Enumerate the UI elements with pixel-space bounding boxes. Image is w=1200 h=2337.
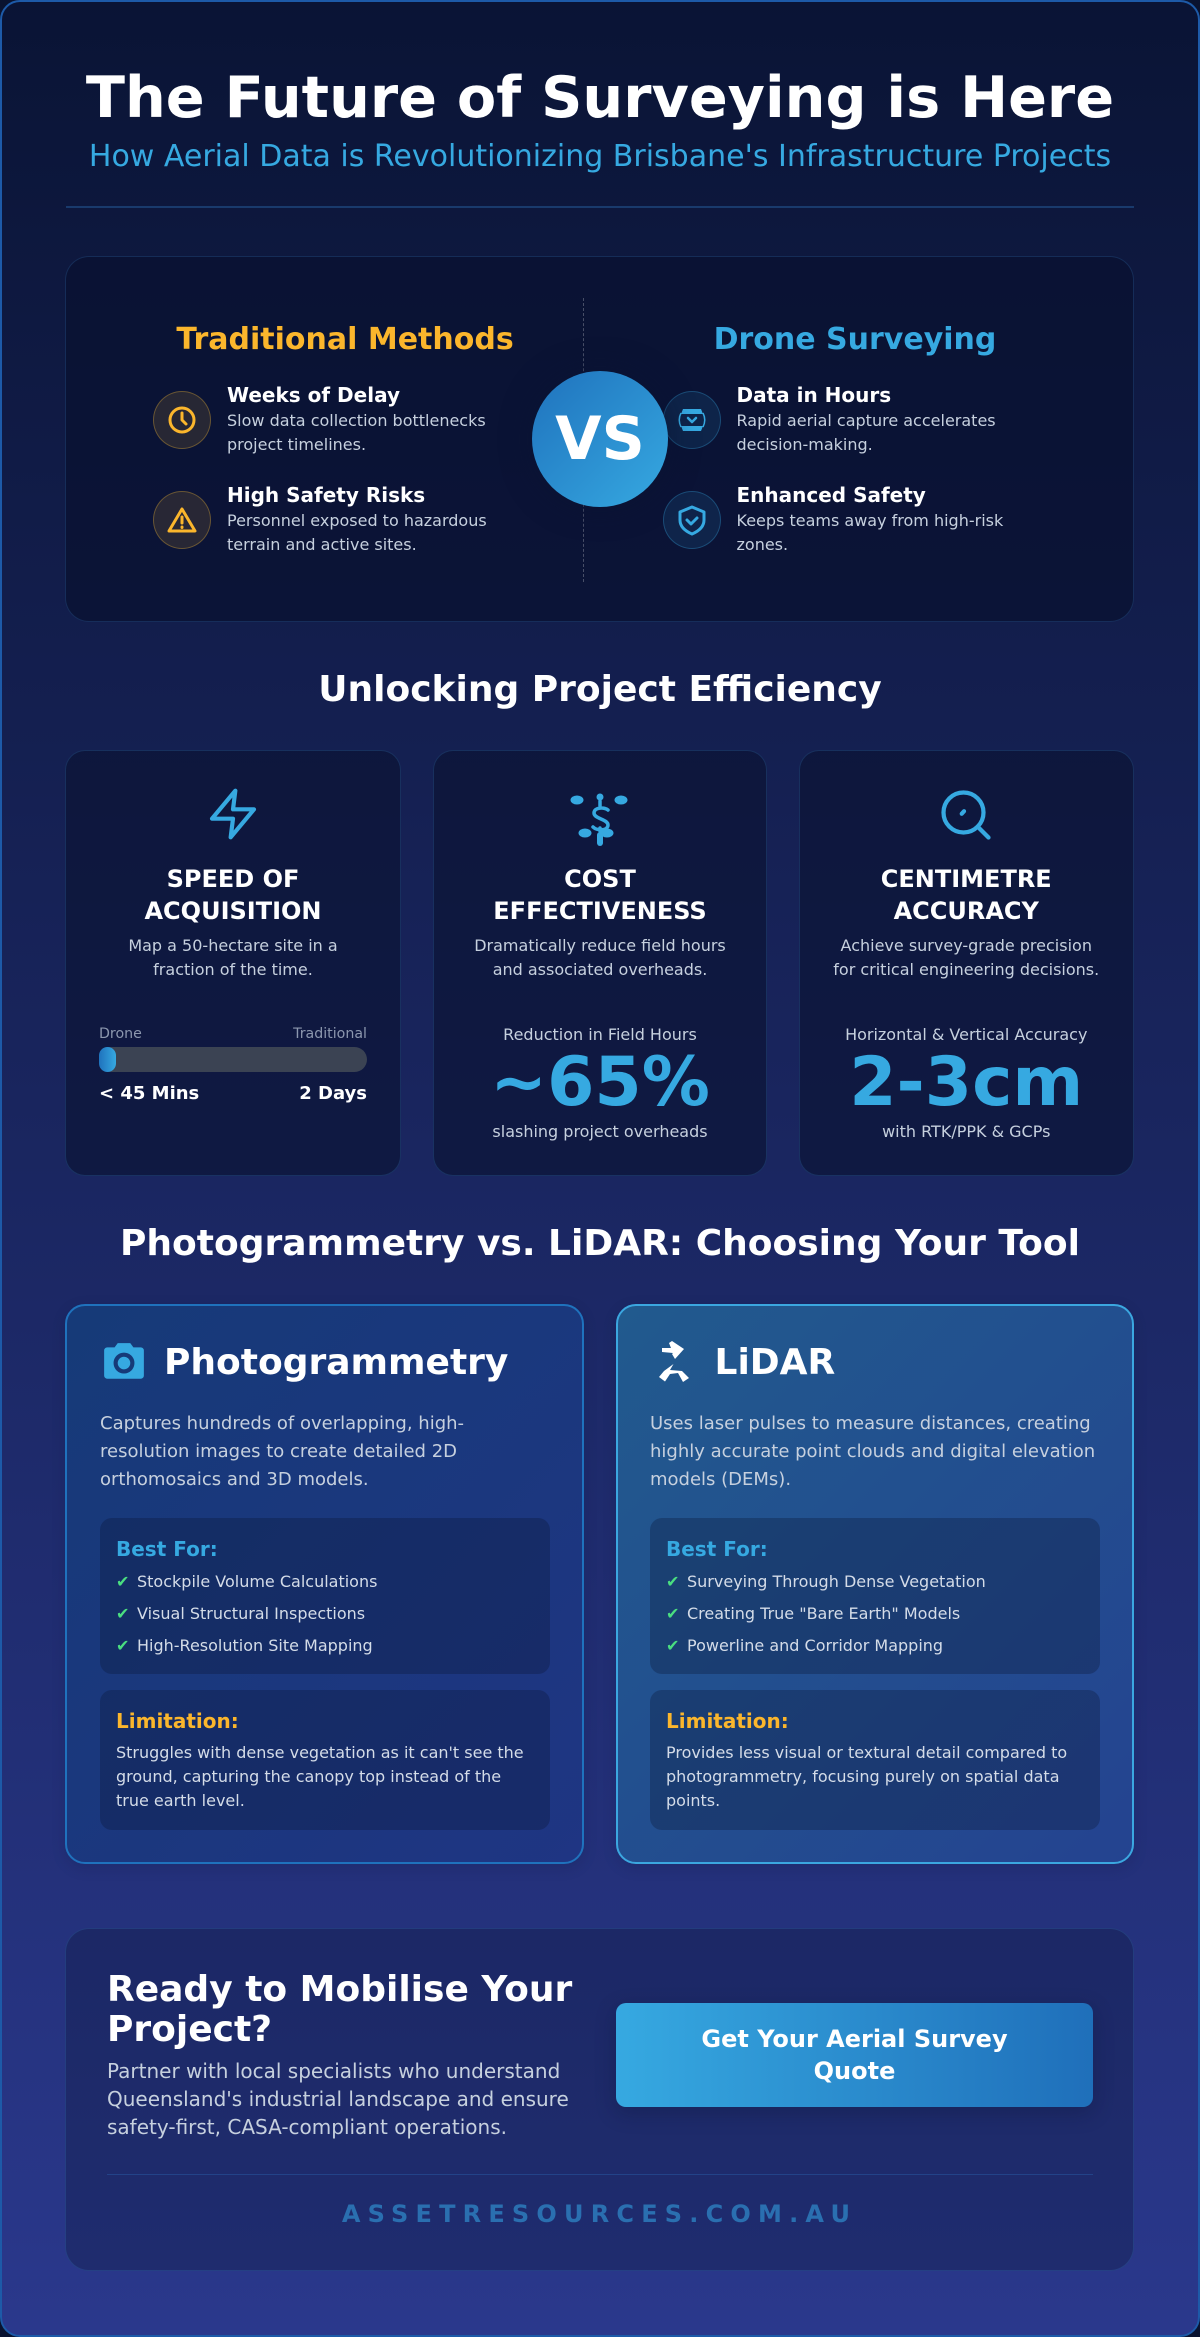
cta heading: Project? [107, 2009, 272, 2050]
panel: speed of acquisition [65, 750, 401, 1176]
icon: shield [662, 490, 720, 548]
text: weeks of delay: project timelines. [227, 435, 366, 454]
limitation box: ground, capturing the canopy top instead of the [116, 1767, 501, 1786]
text: weeks of delay: Slow data collection bottlenecks [227, 411, 486, 430]
subtitle: How Aerial Data is Revolutionizing Brisbane's Infrastructure Projects [89, 138, 1111, 174]
cta button: Get Your Aerial Survey [701, 2024, 1008, 2052]
best-for box: Powerline and Corridor Mapping [687, 1636, 943, 1655]
text: enhanced safety: Keeps teams away from high-risk [736, 511, 1003, 530]
limitation box: Limitation: [116, 1709, 239, 1733]
heading: drone surveying: Drone Surveying [714, 322, 996, 357]
cta button [616, 2002, 1093, 2106]
panel: traditional vs drone comparison [65, 256, 1134, 622]
description: for critical engineering decisions. [833, 960, 1099, 979]
description: resolution images to create detailed 2D [100, 1441, 457, 1462]
limitation box: photogrammetry, focusing purely on spatial data [666, 1767, 1060, 1786]
bar comparison: < 45 Mins [99, 1083, 199, 1104]
panel: photogrammetry [65, 1304, 584, 1864]
limitation box: Provides less visual or textural detail compared to [666, 1743, 1067, 1762]
best-for box: ✔ [666, 1636, 679, 1655]
text: high safety risks: High Safety Risks [227, 483, 425, 507]
heading: LiDAR [714, 1342, 835, 1382]
text: weeks of delay: Weeks of Delay [227, 383, 400, 407]
heading: EFFECTIVENESS [493, 897, 707, 925]
icon: clock [152, 390, 210, 448]
cta description: Queensland's industrial landscape and ensure [107, 2087, 569, 2111]
heading: traditional methods: Traditional Methods [176, 322, 514, 357]
description: models (DEMs). [650, 1469, 791, 1490]
stat: accuracy: with RTK/PPK & GCPs [882, 1122, 1050, 1141]
best-for box: High-Resolution Site Mapping [137, 1636, 373, 1655]
description: highly accurate point clouds and digital elevation [650, 1441, 1095, 1462]
stat: accuracy [845, 1025, 1087, 1141]
heading: CENTIMETRE [881, 865, 1052, 893]
heading: SPEED OF [167, 865, 299, 893]
title: The Future of Surveying is Here [86, 64, 1114, 130]
description: Dramatically reduce field hours [474, 936, 726, 955]
best-for box: ✔ [116, 1572, 129, 1591]
icon: data capture [662, 390, 720, 448]
heading: ACCURACY [894, 897, 1039, 925]
limitation box [650, 1690, 1100, 1830]
description [100, 1413, 464, 1490]
best-for box: Best For: [116, 1537, 218, 1561]
best-for box: ✔ [666, 1572, 679, 1591]
panel: lidar [616, 1304, 1134, 1864]
heading [881, 865, 1052, 925]
heading [144, 865, 322, 925]
description: Achieve survey-grade precision [841, 936, 1092, 955]
icon: warning triangle [152, 490, 210, 548]
icon: lidar [659, 1341, 689, 1382]
description [128, 936, 338, 979]
cta button: Quote [814, 2056, 895, 2084]
description: orthomosaics and 3D models. [100, 1469, 369, 1490]
icon: dollar [570, 794, 628, 846]
bar comparison: 2 Days [299, 1083, 367, 1104]
description: and associated overheads. [493, 960, 707, 979]
limitation box: Struggles with dense vegetation as it can't see the [116, 1743, 524, 1762]
text: high safety risks: Personnel exposed to hazardous [227, 511, 487, 530]
cta heading [107, 1969, 572, 2050]
stat: reduction in field hours [490, 1025, 710, 1141]
stat: reduction in field hours: Reduction in Field Hours [503, 1025, 697, 1044]
description: fraction of the time. [153, 960, 313, 979]
description: Map a 50-hectare site in a [128, 936, 338, 955]
text: weeks of delay [227, 383, 486, 454]
text: data in hours [736, 383, 996, 454]
bar comparison: Drone [99, 1026, 142, 1042]
best-for box [100, 1518, 550, 1674]
best-for box: Creating True "Bare Earth" Models [687, 1604, 960, 1623]
description [833, 936, 1099, 979]
icon: lightning bolt [210, 788, 256, 840]
best-for box: Stockpile Volume Calculations [137, 1572, 377, 1591]
cta description [107, 2059, 569, 2139]
limitation box: Limitation: [666, 1709, 789, 1733]
website: ASSETRESOURCES.COM.AU [342, 2200, 857, 2228]
text: high safety risks: terrain and active sites. [227, 535, 417, 554]
best-for box: Visual Structural Inspections [137, 1604, 365, 1623]
description [650, 1413, 1095, 1490]
heading: Photogrammetry [164, 1342, 508, 1382]
stat: reduction in field hours: slashing project overheads [492, 1122, 708, 1141]
text: enhanced safety: zones. [736, 535, 788, 554]
section heading: tool comparison: Photogrammetry vs. LiDAR: Choosing Your Tool [120, 1223, 1080, 1264]
stat: accuracy: Horizontal & Vertical Accuracy [845, 1025, 1087, 1044]
bar comparison: Traditional [293, 1026, 367, 1042]
best-for box: Surveying Through Dense Vegetation [687, 1572, 986, 1591]
best-for box: ✔ [116, 1636, 129, 1655]
text: data in hours: Data in Hours [736, 383, 891, 407]
best-for box: ✔ [116, 1604, 129, 1623]
vs badge [532, 371, 668, 507]
best-for box: Best For: [666, 1537, 768, 1561]
text: enhanced safety: Enhanced Safety [736, 483, 926, 507]
cta description: Partner with local specialists who understand [107, 2059, 560, 2083]
limitation box [100, 1690, 550, 1830]
icon: magnifier [941, 790, 991, 840]
stat: reduction in field hours: ~65% [490, 1043, 710, 1122]
description: Uses laser pulses to measure distances, creating [650, 1413, 1091, 1434]
stat: accuracy: 2-3cm [849, 1043, 1083, 1122]
description [474, 936, 726, 979]
heading: ACQUISITION [144, 897, 322, 925]
text: data in hours: Rapid aerial capture accelerates [736, 411, 996, 430]
text: enhanced safety [736, 483, 1004, 554]
icon: camera [104, 1343, 144, 1379]
panel: centimetre accuracy [798, 750, 1134, 1176]
description: Captures hundreds of overlapping, high- [100, 1413, 464, 1434]
best-for box [650, 1518, 1100, 1674]
vs badge: VS [555, 404, 645, 474]
text: high safety risks [227, 483, 487, 554]
limitation box: points. [666, 1791, 720, 1810]
heading [493, 865, 707, 925]
text: data in hours: decision-making. [736, 435, 873, 454]
section heading: efficiency: Unlocking Project Efficiency [318, 669, 882, 710]
limitation box: true earth level. [116, 1791, 245, 1810]
cta heading: Ready to Mobilise Your [107, 1969, 572, 2010]
bar comparison [99, 1026, 367, 1104]
heading: COST [564, 865, 636, 893]
panel: cost effectiveness [433, 750, 767, 1176]
best-for box: ✔ [666, 1604, 679, 1623]
cta description: safety-first, CASA-compliant operations. [107, 2115, 507, 2139]
panel: call to action [65, 1928, 1134, 2271]
